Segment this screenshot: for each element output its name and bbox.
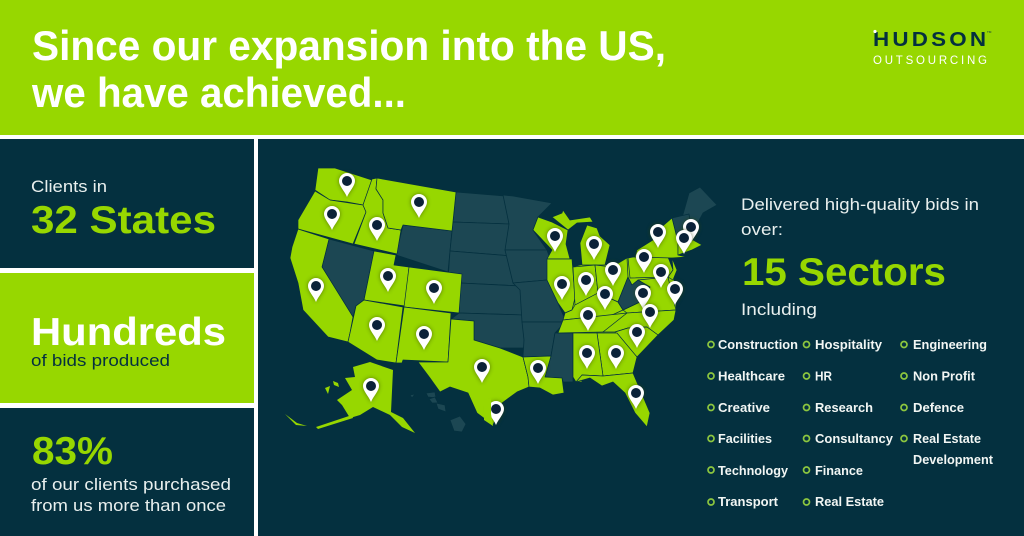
states with clients [290, 168, 702, 427]
logo: Hudson Outsourcing: HUDSON [873, 29, 986, 51]
title: Since our expansion into the US, [32, 22, 666, 69]
sector list: Healthcare [718, 370, 785, 384]
sector list: Facilities [718, 432, 772, 446]
sector list: Finance [815, 464, 863, 478]
sector list [708, 338, 994, 509]
sector list: Real Estate [913, 432, 981, 446]
sector list: Non Profit [913, 370, 976, 384]
panel: 83 percent repeat clients: of our clients purchased [31, 475, 231, 494]
states without clients [322, 187, 717, 432]
sector list: Development [913, 453, 994, 467]
panel: clients in 32 states: 32 States [31, 199, 216, 242]
panel: 83 percent repeat clients [0, 408, 254, 536]
sector list: Transport [718, 495, 779, 509]
Texas coast overlap [484, 398, 493, 426]
sector list: Creative [718, 401, 770, 415]
sector list: Defence [913, 401, 964, 415]
sector list: Engineering [913, 338, 987, 352]
sectors heading [741, 195, 979, 319]
sector list: Research [815, 401, 873, 415]
eastern landmass underlay [547, 257, 676, 382]
sector list: Real Estate [815, 495, 884, 509]
sector list: Consultancy [815, 432, 893, 446]
title: we have achieved... [31, 69, 406, 116]
Alaska [285, 362, 415, 433]
panel: 83 percent repeat clients: from us more than once [31, 496, 226, 515]
sectors heading: 15 Sectors [742, 251, 946, 294]
title [31, 22, 666, 116]
sector list: Technology [718, 464, 788, 478]
panel: map and sectors background [258, 139, 1024, 536]
bullets [708, 342, 907, 505]
US map [285, 168, 717, 433]
sectors heading: Delivered high-quality bids in [741, 195, 979, 214]
panel: hundreds of bids: of bids produced [31, 351, 170, 370]
logo: Hudson Outsourcing: OUTSOURCING [873, 55, 987, 67]
panel: 83 percent repeat clients: 83% [32, 430, 113, 473]
panel: hundreds of bids: Hundreds [31, 311, 226, 354]
sector list: Hospitality [815, 338, 882, 352]
sectors heading: Including [741, 300, 817, 319]
panel: hundreds of bids [0, 273, 254, 403]
West Virginia [618, 277, 650, 310]
sector list: Construction [718, 338, 798, 352]
panel: clients in 32 states: Clients in [31, 177, 107, 196]
logo: Hudson Outsourcing: TM [987, 30, 992, 34]
sectors heading: over: [741, 220, 783, 239]
logo: Hudson Outsourcing [873, 29, 992, 67]
header banner [0, 0, 1024, 135]
map pins [308, 173, 699, 426]
panel: clients in 32 states [0, 139, 254, 268]
sector list: HR [815, 370, 832, 384]
